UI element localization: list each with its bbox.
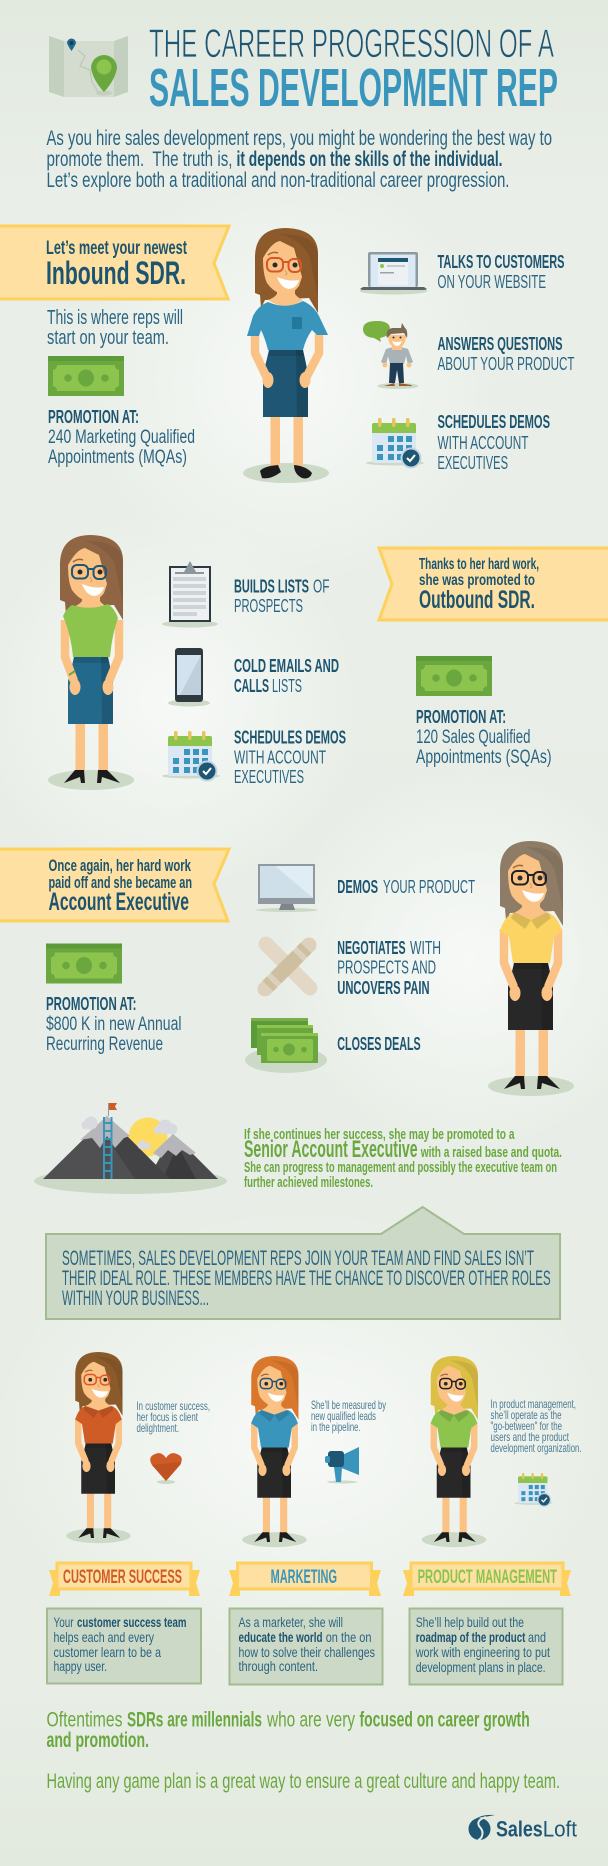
text: promotion threshold (48, 407, 195, 468)
text: marketing note: She’ll be measured by (311, 1398, 386, 1412)
banner: account executive (0, 849, 229, 921)
text box: product management: and (528, 1629, 546, 1645)
text: senior account executive: Senior Account Executive (244, 1136, 418, 1163)
text: builds lists: BUILDS LISTS (234, 576, 309, 596)
figure: marketing woman (242, 1356, 307, 1547)
text: demos: DEMOS (337, 876, 378, 897)
text: builds lists: OF (313, 576, 330, 596)
text: cold emails: COLD EMAILS AND (234, 655, 339, 676)
text: senior account executive (244, 1126, 562, 1191)
callout: other roles: WITHIN YOUR BUSINESS... (62, 1287, 209, 1310)
column: marketing (229, 1356, 386, 1684)
figure: product management woman (422, 1356, 486, 1547)
title (149, 22, 558, 118)
text: customer success note: delightment. (136, 1421, 179, 1435)
text box: product management: roadmap of the product (416, 1629, 526, 1645)
logo: SalesLoft (468, 1815, 577, 1842)
text box: product management: work with engineering to put (415, 1644, 550, 1660)
banner: account executive: Account Executive (48, 888, 189, 916)
banner: inbound SDR: Let’s meet your newest (46, 238, 187, 259)
banner: inbound SDR: Inbound SDR. (46, 255, 186, 291)
panel: outbound SDR (48, 535, 608, 790)
text box: customer success: Your (54, 1614, 74, 1630)
text: promotion threshold: PROMOTION AT: (46, 994, 136, 1014)
banner: inbound SDR (0, 226, 229, 299)
banner: outbound SDR: Outbound SDR. (419, 586, 535, 614)
closing text (46, 1709, 560, 1793)
ribbon: marketing: MARKETING (271, 1567, 337, 1588)
text: promotion threshold: PROMOTION AT: (48, 407, 139, 427)
intro text: promote them. The truth is, (46, 148, 232, 171)
text: promotion threshold: Appointments (MQAs) (48, 447, 187, 468)
icon: money (46, 944, 122, 984)
text box: customer success: helps each and every (54, 1629, 154, 1645)
text: builds lists (234, 576, 330, 616)
text: negotiates (337, 937, 441, 998)
text: product management note (490, 1397, 582, 1455)
ribbon: customer success (49, 1563, 200, 1596)
icon: small calendar (514, 1473, 553, 1507)
banner: account executive: paid off and she became an (48, 874, 192, 892)
text box: customer success: customer learn to be a (54, 1644, 161, 1660)
text: marketing note (311, 1398, 386, 1434)
figure: inbound SDR woman (243, 228, 329, 483)
text: schedules demos: EXECUTIVES (438, 452, 508, 473)
text box: marketing: educate the world (238, 1629, 322, 1645)
text: product management note: she’ll operate as the (490, 1408, 562, 1422)
text: schedules demos: WITH ACCOUNT (234, 746, 326, 768)
banner: outbound SDR (379, 548, 608, 620)
figure: customer success woman (66, 1352, 131, 1543)
text: demos (337, 876, 475, 897)
closing text: SDRs are millennials (127, 1709, 262, 1732)
text: schedules demos: WITH ACCOUNT (438, 432, 528, 453)
text box: product management: development plans in place. (416, 1659, 546, 1675)
text: negotiates: NEGOTIATES (337, 937, 406, 958)
text: marketing note: in the pipeline. (311, 1420, 360, 1434)
closing text: Oftentimes (46, 1709, 122, 1732)
text: schedules demos (234, 726, 346, 787)
icon: folded map with location pins (49, 36, 128, 97)
ribbon: customer success: CUSTOMER SUCCESS (63, 1567, 182, 1588)
ribbon: product management (403, 1563, 571, 1596)
text: promotion threshold: Recurring Revenue (46, 1034, 163, 1055)
text: closes deals: CLOSES DEALS (337, 1033, 421, 1054)
text: promotion threshold: 120 Sales Qualified (416, 727, 530, 748)
icon: megaphone (325, 1447, 359, 1484)
text: builds lists: PROSPECTS (234, 595, 303, 616)
text: negotiates: UNCOVERS PAIN (337, 977, 430, 998)
text: promotion threshold: $800 K in new Annual (46, 1014, 182, 1035)
text: schedules demos: SCHEDULES DEMOS (234, 726, 346, 748)
text: product management note: users and the product (490, 1430, 569, 1444)
text: negotiates: WITH (410, 937, 441, 958)
logo: SalesLoft: Loft (543, 1816, 577, 1842)
text box: product management (410, 1608, 562, 1684)
text: schedules demos (438, 411, 550, 473)
text: cold emails: CALLS (234, 675, 269, 696)
icon: man with speech bubble (363, 321, 418, 389)
text: talks to customers (438, 251, 564, 292)
panel: account executive (0, 841, 574, 1096)
text: cold emails: LISTS (272, 675, 302, 696)
ribbon: marketing (229, 1563, 381, 1596)
text: starting point: start on your team. (47, 327, 169, 349)
icon: stack of cash (245, 1018, 327, 1073)
icon: laptop (360, 252, 428, 294)
text: talks to customers: ON YOUR WEBSITE (438, 271, 546, 292)
text: product management note: "go-between" for the (490, 1419, 562, 1433)
text box: customer success: happy user. (54, 1658, 107, 1674)
text: senior account executive: further achieved milestones. (244, 1174, 373, 1191)
text: promotion threshold: Appointments (SQAs) (416, 747, 552, 768)
icon: smartphone (168, 648, 210, 706)
callout: other roles (46, 1207, 560, 1319)
text box: marketing: on the on (326, 1629, 372, 1645)
logo: SalesLoft: Sales (496, 1816, 543, 1842)
text: starting point: This is where reps will (47, 307, 183, 329)
illustration: mountain with ladder, flag and sun (34, 1103, 227, 1194)
banner: outbound SDR: she was promoted to (419, 572, 535, 589)
column: customer success (47, 1352, 210, 1684)
icon: clipboard (162, 561, 218, 628)
text: marketing note: new qualified leads (311, 1409, 376, 1423)
text box: customer success: customer success team (77, 1614, 186, 1630)
text: promotion threshold: 240 Marketing Qualified (48, 427, 195, 448)
panel: inbound SDR (0, 226, 574, 483)
text box: customer success (47, 1608, 201, 1684)
text: customer success note: In customer success, (136, 1399, 210, 1413)
banner: account executive: Once again, her hard work (48, 857, 192, 875)
text: answers questions (438, 333, 574, 374)
text: demos: YOUR PRODUCT (383, 876, 475, 897)
icon: calendar (366, 418, 424, 468)
icon: desktop monitor (256, 864, 318, 912)
text: customer success note: her focus is client (136, 1410, 198, 1424)
banner: outbound SDR: Thanks to her hard work, (419, 556, 539, 573)
text: promotion threshold (46, 994, 182, 1055)
icon: calendar (162, 731, 220, 782)
figure: account executive woman (488, 841, 574, 1096)
icon: money (416, 656, 492, 696)
text: cold emails (234, 655, 339, 696)
figure: outbound SDR woman (48, 535, 134, 790)
text: starting point (47, 307, 183, 349)
icon: heart (150, 1453, 182, 1484)
icon: money (48, 356, 124, 396)
intro text (46, 127, 552, 192)
text: negotiates: PROSPECTS AND (337, 956, 436, 978)
column: product management (403, 1356, 582, 1684)
text box: marketing: how to solve their challenges (238, 1644, 375, 1660)
text: promotion threshold (416, 707, 552, 768)
text box: marketing (230, 1608, 382, 1684)
closing text: and promotion. (46, 1729, 149, 1752)
text: customer success note (136, 1399, 210, 1435)
closing text: who are very (266, 1709, 355, 1732)
icon: crossed bandages (265, 944, 310, 989)
text box: marketing: As a marketer, she will (238, 1614, 343, 1630)
text: promotion threshold: PROMOTION AT: (416, 707, 506, 727)
text box: marketing: through content. (238, 1658, 318, 1674)
text box: product management: She’ll help build out the (416, 1614, 524, 1630)
text: schedules demos: EXECUTIVES (234, 766, 304, 787)
